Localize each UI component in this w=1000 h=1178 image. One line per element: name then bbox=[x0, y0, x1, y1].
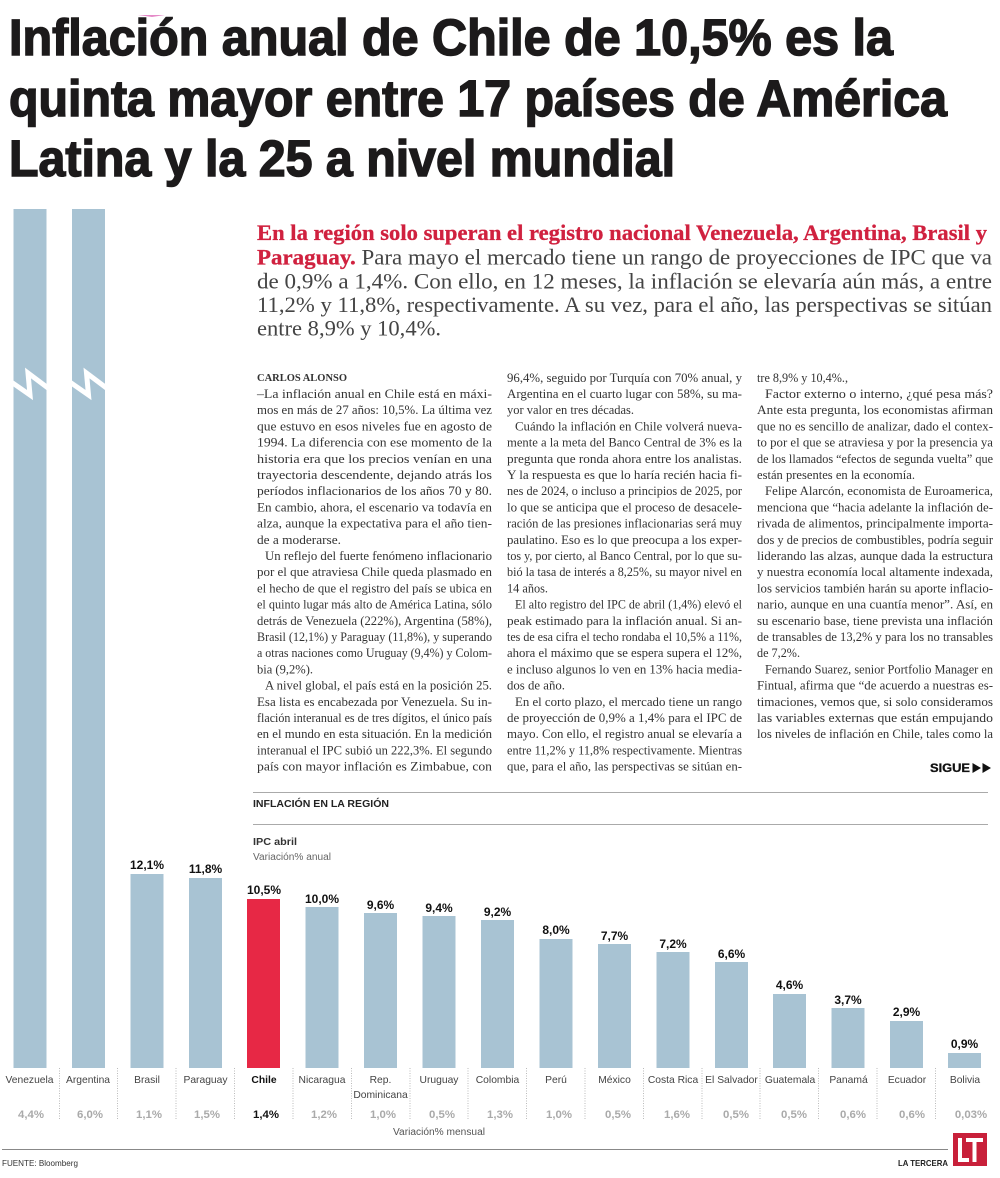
country names: Uruguay bbox=[420, 1075, 459, 1086]
article column 3: Fernando Suarez, senior Portfolio Manager en bbox=[765, 662, 994, 676]
article column 2: El alto registro del IPC de abril (1,4%) elevó el bbox=[515, 598, 742, 612]
country names: México bbox=[598, 1075, 631, 1086]
article column 3: to por el que se atraviesa y por la presencia ya bbox=[757, 436, 993, 450]
country names: Costa Rica bbox=[648, 1075, 698, 1086]
article column 3: de los llamados “efectos de segunda vuelta” que bbox=[757, 452, 993, 466]
country names: Panamá bbox=[829, 1075, 868, 1086]
continuation marker: sigue: SIGUE bbox=[930, 761, 970, 775]
lede paragraph bbox=[257, 220, 992, 340]
article column 2 bbox=[507, 371, 743, 774]
article column 1: el hecho de que el registro del país se ubica en bbox=[257, 581, 493, 595]
article column 3 bbox=[757, 371, 994, 741]
monthly variation values: 0,6% bbox=[899, 1109, 925, 1121]
print mark bbox=[138, 15, 165, 17]
article column 3: de 7,2%. bbox=[757, 646, 800, 660]
bar value labels: 6,6% bbox=[718, 947, 746, 961]
monthly variation values: 0,5% bbox=[723, 1109, 749, 1121]
article column 1: de a moderarse. bbox=[257, 533, 341, 547]
article column 3: y nuestra economía local altamente indexada, bbox=[757, 565, 993, 579]
article column 2: Argentina en el cuarto lugar con 58%, su ma- bbox=[507, 387, 742, 401]
article column 1: –La inflación anual en Chile está en máxi- bbox=[256, 387, 492, 401]
article column 1: país con mayor inflación es Zimbabue, con bbox=[257, 760, 493, 774]
article column 1: por el que atraviesa Chile queda plasmado en bbox=[257, 565, 493, 579]
article column 1: mos en más de 27 años: 10,5%. La última vez bbox=[257, 403, 492, 417]
bar value labels: 9,6% bbox=[367, 898, 395, 912]
article column 1: Brasil (12,1%) y Paraguay (11,8%), y superando bbox=[257, 630, 492, 644]
chart section heading: INFLACIÓN EN LA REGIÓN bbox=[253, 797, 389, 810]
source: FUENTE: Bloomberg bbox=[2, 1158, 78, 1168]
country names: Argentina bbox=[66, 1075, 110, 1086]
country names: Perú bbox=[545, 1075, 567, 1086]
monthly variation values: 1,5% bbox=[194, 1109, 220, 1121]
monthly variation values: 0,5% bbox=[605, 1109, 631, 1121]
article column 1: a otras naciones como Uruguay (9,4%) y Colom- bbox=[257, 646, 492, 660]
bar value labels: 9,4% bbox=[425, 901, 453, 915]
monthly variation values: 1,0% bbox=[370, 1109, 396, 1121]
country names: El Salvador bbox=[705, 1075, 758, 1086]
bar value labels: 0,9% bbox=[951, 1037, 979, 1051]
monthly variation values: 1,3% bbox=[487, 1109, 513, 1121]
article column 1: interanual el IPC subió un 222,3%. El segundo bbox=[257, 743, 492, 757]
article column 2: dos de año. bbox=[507, 679, 565, 693]
footer rule bbox=[2, 1148, 948, 1150]
monthly variation values: 0,5% bbox=[429, 1109, 455, 1121]
country names: Brasil bbox=[134, 1075, 160, 1086]
article column 2: ración de las presiones inflacionarias será muy bbox=[507, 517, 743, 531]
article column 1: Un reflejo del fuerte fenómeno inflacionario bbox=[265, 549, 492, 563]
article column 2: mente a la meta del Banco Central de 3% es la bbox=[507, 436, 742, 450]
country names: Rep. bbox=[370, 1075, 391, 1086]
article column 3: timaciones, vemos que, si solo consideramos bbox=[757, 695, 993, 709]
title bbox=[9, 9, 948, 187]
bar value labels: 3,7% bbox=[834, 993, 862, 1007]
chart subtitle bbox=[253, 836, 331, 863]
bar value labels: 9,2% bbox=[484, 905, 512, 919]
article column 2: tos y, por cierto, al Banco Central, por lo que su- bbox=[507, 549, 742, 563]
article column 2: pregunta que ronda ahora entre los analistas. bbox=[507, 452, 742, 466]
article column 3: su escenario base, tiene prevista una inflación bbox=[757, 614, 994, 628]
article column 1: bia (9,2%). bbox=[257, 662, 313, 676]
article column 3: Fintual, afirma que “de acuerdo a nuestras es- bbox=[757, 679, 993, 693]
logo: LT bbox=[953, 1133, 987, 1166]
article column 3: tre 8,9% y 10,4%., bbox=[757, 371, 848, 385]
column dividers bbox=[60, 1068, 936, 1120]
bar value labels: 7,7% bbox=[601, 929, 629, 943]
monthly variation values: 1,2% bbox=[311, 1109, 337, 1121]
article column 1: períodos inflacionarios de los años 70 y 80. bbox=[257, 484, 492, 498]
title: quinta mayor entre 17 países de América bbox=[9, 70, 948, 127]
monthly variation values: 0,6% bbox=[840, 1109, 866, 1121]
chart subtitle: Variación% anual bbox=[253, 852, 331, 863]
lede paragraph: En la región solo superan el registro nacional Venezuela, Argentina, Brasil y bbox=[257, 220, 987, 245]
country names: Paraguay bbox=[183, 1075, 228, 1086]
title: Latina y la 25 a nivel mundial bbox=[9, 130, 675, 187]
article column 2: lo que se anticipa que el proceso de desacele- bbox=[507, 500, 742, 514]
bar value labels: 12,1% bbox=[130, 858, 164, 872]
lede paragraph: 11,2% y 11,8%, respectivamente. A su vez, para el año, las perspectivas se sitúan bbox=[257, 292, 992, 317]
country names: Venezuela bbox=[5, 1075, 54, 1086]
monthly variation values: 1,6% bbox=[664, 1109, 690, 1121]
lede paragraph: entre 8,9% y 10,4%. bbox=[257, 316, 441, 340]
article column 3: nario, aunque en una cuantía menor”. Así, en bbox=[757, 598, 994, 612]
article column 2: 96,4%, seguido por Turquía con 70% anual, y bbox=[507, 371, 743, 385]
country names: Ecuador bbox=[888, 1075, 927, 1086]
article column 3: están presentes en la economía. bbox=[757, 468, 915, 482]
article column 2: entre 11,2% y 11,8% respectivamente. Mientras bbox=[507, 743, 742, 757]
article column 1: flación interanual es de tres dígitos, el único país bbox=[257, 711, 492, 725]
article column 1 bbox=[256, 373, 493, 774]
article column 1: el quinto lugar más alto de América Latina, sólo bbox=[257, 598, 492, 612]
publisher name: LA TERCERA bbox=[898, 1158, 948, 1168]
article column 3: los servicios también harán su aporte inflacio- bbox=[757, 581, 993, 595]
bar value labels bbox=[130, 858, 979, 1051]
monthly variation values: 1,4% bbox=[253, 1109, 279, 1121]
article column 3: de transables de 13,2% y para los no transables bbox=[757, 630, 993, 644]
article column 2: mayo. Con ello, el registro anual se elevaría a bbox=[507, 727, 742, 741]
article column 2: nes de 2024, o incluso a principios de 2025, por bbox=[507, 484, 743, 498]
monthly variation values: 0,5% bbox=[781, 1109, 807, 1121]
monthly variation values: 4,4% bbox=[18, 1109, 44, 1121]
chart subtitle: IPC abril bbox=[253, 836, 297, 848]
country names: Chile bbox=[251, 1075, 277, 1086]
article column 1: A nivel global, el país está en la posición 25. bbox=[265, 679, 492, 693]
article column 2: ahora el máximo que se espera supera el 12%, bbox=[507, 646, 742, 660]
article column 1: detrás de Venezuela (222%), Argentina (58%), bbox=[257, 614, 492, 628]
article column 3: liderando las alzas, aunque dada la estructura bbox=[757, 549, 993, 563]
article column 2: yor valor en tres décadas. bbox=[507, 403, 634, 417]
article column 3: dos y de precios de combustibles, podría seguir bbox=[757, 533, 994, 547]
bars: remaining countries bbox=[130, 874, 981, 1068]
article column 3: menciona que “hacia adelante la inflación de- bbox=[757, 500, 993, 514]
country names: Dominicana bbox=[353, 1090, 408, 1101]
article column 2: de proyección de 0,9% a 1,4% para el IPC de bbox=[507, 711, 742, 725]
bar value labels: 11,8% bbox=[189, 862, 223, 876]
bar value labels: 10,0% bbox=[305, 892, 339, 906]
article column 1: que estuvo en esos niveles fue en agosto de bbox=[257, 419, 492, 433]
lede paragraph: de 0,9% a 1,4%. Con ello, en 12 meses, la inflación se elevaría aún más, a entre bbox=[257, 268, 992, 294]
title: Inflación anual de Chile de 10,5% es la bbox=[9, 9, 894, 66]
article column 1: Esa lista es encabezada por Venezuela. Su in- bbox=[257, 695, 492, 709]
bar value labels: 10,5% bbox=[247, 883, 281, 897]
lede paragraph: Paraguay. Para mayo el mercado tiene un rango de proyecciones de IPC que va bbox=[257, 244, 992, 270]
monthly variation values: 6,0% bbox=[77, 1109, 103, 1121]
bar: Venezuela, truncated bbox=[12, 209, 48, 1068]
article column 3: Factor externo o interno, ¿qué pesa más? bbox=[765, 387, 993, 401]
article column 3: que no es sencillo de analizar, dado el contex- bbox=[757, 419, 993, 433]
continuation marker: sigue bbox=[930, 761, 991, 775]
article column 1: En cambio, ahora, el escenario va todavía en bbox=[257, 500, 493, 514]
article column 2: e incluso algunos lo ven en 13% hacia media- bbox=[507, 662, 742, 676]
country names: Nicaragua bbox=[299, 1075, 346, 1086]
article column 3: Ante esta pregunta, los economistas afirman bbox=[757, 403, 994, 417]
monthly variation values: 0,03% bbox=[955, 1109, 987, 1121]
bar: Argentina, truncated bbox=[70, 209, 106, 1068]
monthly variation values bbox=[18, 1109, 987, 1121]
article column 1: CARLOS ALONSO bbox=[257, 373, 347, 384]
article column 2: Y la respuesta es que lo haría recién hacia fi- bbox=[507, 468, 742, 482]
article column 2: paulatino. Eso es lo que preocupa a los exper- bbox=[507, 533, 742, 547]
country names: Colombia bbox=[476, 1075, 520, 1086]
article column 3: rivada de alimentos, principalmente importa- bbox=[757, 517, 993, 531]
country names bbox=[5, 1075, 980, 1101]
country names: Guatemala bbox=[765, 1075, 815, 1086]
bar chart: annual inflation bbox=[12, 209, 981, 1068]
article column 1: historia era que los precios venían en una bbox=[257, 452, 492, 466]
article column 2: que, para el año, las perspectivas se sitúan en- bbox=[507, 760, 742, 774]
article column 2: Cuándo la inflación en Chile volverá nueva- bbox=[515, 419, 742, 433]
article column 3: los niveles de inflación en Chile, tales como la bbox=[757, 727, 993, 741]
article column 3: las variables externas que están empujando bbox=[757, 711, 993, 725]
monthly variation values: 1,0% bbox=[546, 1109, 572, 1121]
article column 2: tes de esa cifra el techo rondaba el 10,5% a 11%, bbox=[507, 630, 742, 644]
bar value labels: 2,9% bbox=[893, 1005, 921, 1019]
article column 1: 1994. La diferencia con ese momento de la bbox=[257, 436, 492, 450]
article column 2: peak estimado para la inflación anual. Si an- bbox=[507, 614, 742, 628]
article column 3: Felipe Alarcón, economista de Euroamerica, bbox=[765, 484, 993, 498]
article column 1: trayectoria descendente, dejando atrás los bbox=[257, 468, 492, 482]
country names: Bolivia bbox=[950, 1075, 980, 1086]
article column 1: en el mundo en esta situación. En la medición bbox=[257, 727, 493, 741]
bar value labels: 8,0% bbox=[542, 923, 570, 937]
bar value labels: 7,2% bbox=[659, 937, 687, 951]
monthly variation values: 1,1% bbox=[136, 1109, 162, 1121]
article column 2: En el corto plazo, el mercado tiene un rango bbox=[515, 695, 742, 709]
monthly variation caption: Variación% mensual bbox=[393, 1127, 485, 1138]
article column 2: 14 años. bbox=[507, 581, 548, 595]
bar value labels: 4,6% bbox=[776, 978, 804, 992]
article column 1: alza, aunque la expectativa para el año tien- bbox=[257, 517, 492, 531]
article column 2: bió la tasa de interés a 8,25%, su mayor nivel en bbox=[507, 565, 743, 579]
